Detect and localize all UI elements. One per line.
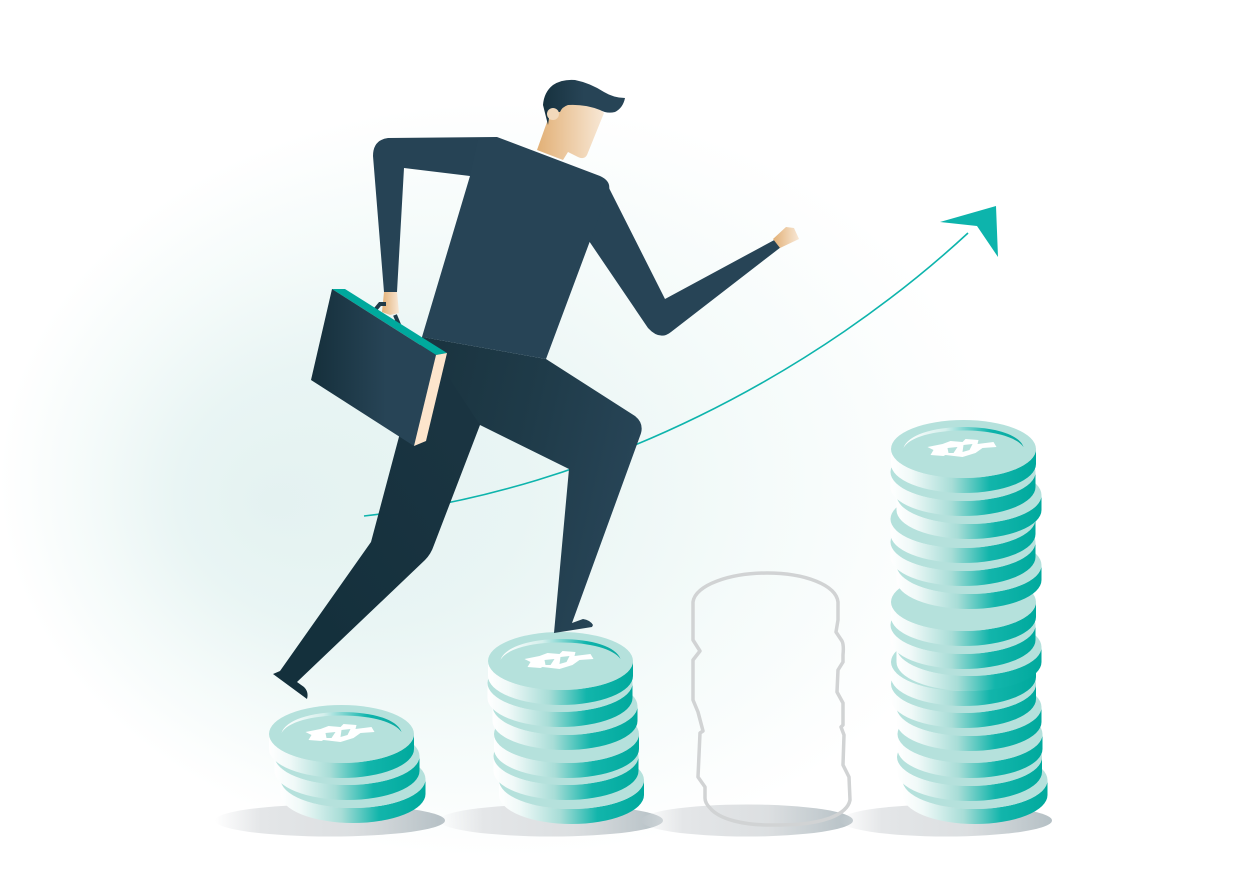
ear: [547, 108, 559, 120]
arrow head: [940, 206, 998, 257]
empty coin stack outline: [693, 573, 850, 825]
torso: [422, 137, 609, 359]
briefcase top edge: [332, 289, 447, 355]
growth line: [364, 233, 968, 516]
coin stack 2: [488, 632, 644, 824]
ground shadows: [215, 804, 1052, 836]
briefcase cream side: [414, 353, 447, 446]
right hand: [773, 227, 799, 248]
coin stack 1: [269, 705, 426, 823]
right arm: [589, 180, 781, 336]
coin stack 4: [890, 420, 1048, 824]
handle: [375, 304, 400, 327]
front leg: [422, 337, 642, 633]
left arm: [373, 137, 500, 292]
briefcase: [311, 289, 447, 446]
briefcase face: [311, 289, 436, 446]
left hand: [382, 292, 399, 315]
businessman: [273, 80, 799, 699]
neck and face: [537, 100, 604, 160]
back leg: [273, 337, 500, 699]
hair: [543, 80, 625, 125]
background glow: [0, 102, 1000, 858]
